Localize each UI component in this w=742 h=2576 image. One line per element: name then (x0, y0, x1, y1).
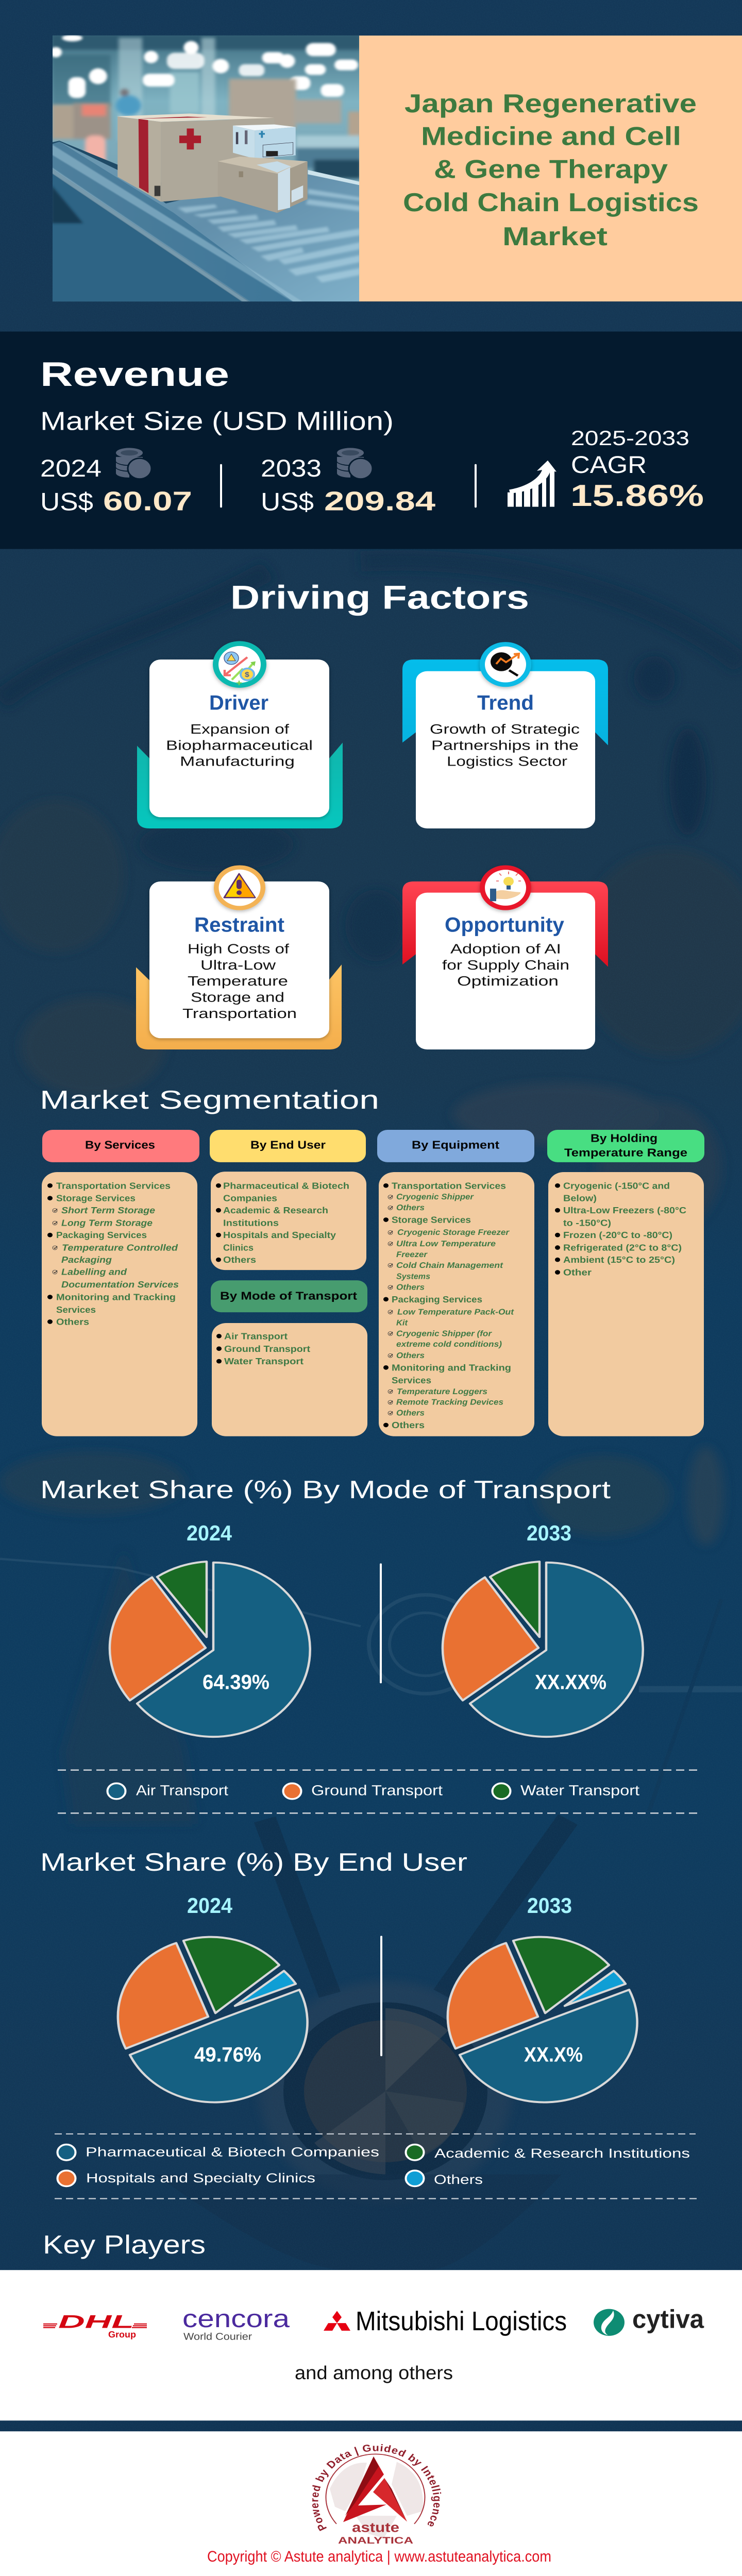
icon: warning triangle (214, 865, 265, 910)
list: temperature ranges: Frozen (-20°C to -80°C) (563, 1230, 672, 1241)
list: modes of transport: Air Transport (224, 1332, 288, 1342)
card: restraint (136, 865, 342, 1049)
description: restraint: High Costs of (188, 942, 290, 956)
revenue panel (0, 332, 742, 549)
legend: mode of transport: Water Transport (520, 1782, 639, 1799)
logo: cencora world courier: World Courier (183, 2331, 252, 2342)
footer panel (0, 2431, 742, 2576)
column: by holding temperature range (547, 1130, 704, 1436)
list: equipment: Cryogenic Shipper (for (396, 1329, 492, 1338)
list: equipment: Others (396, 1351, 425, 1360)
list: temperature ranges (548, 1172, 704, 1436)
list: temperature ranges: Ultra-Low Freezers (-80°C (563, 1206, 686, 1216)
list: services: Packaging Services (56, 1230, 147, 1241)
copyright line: Copyright © Astute analytica | www.astuteanalytica.com (207, 2548, 551, 2565)
list: equipment: Others (396, 1283, 425, 1292)
list: equipment: Cryogenic Storage Freezer (397, 1228, 510, 1237)
list: equipment: Others (396, 1409, 425, 1417)
list: services: Documentation Services (61, 1280, 179, 1290)
year label 2024: 2024 (187, 1521, 232, 1546)
description: trend: Partnerships in the (431, 738, 579, 753)
description: restraint (182, 942, 297, 1021)
list: equipment: extreme cold conditions) (396, 1340, 502, 1349)
stat: 2024: 2024 (40, 455, 102, 482)
header: by mode of transport (211, 1280, 367, 1312)
stat: 2033 (261, 448, 436, 516)
stat: 2033: 209.84 (324, 486, 436, 516)
header: by end user (210, 1130, 366, 1162)
list: services: Short Term Storage (61, 1206, 155, 1216)
legend: mode of transport (107, 1782, 639, 1799)
header: by holding temperature range: By Holding (591, 1132, 657, 1145)
card: trend (402, 642, 608, 828)
icon: coins (116, 448, 151, 479)
description: opportunity: Adoption of AI (450, 942, 561, 956)
list: end users: Academic & Research (223, 1206, 328, 1216)
year label 2024: 2024 (187, 1894, 232, 1918)
logo: astute analytica: Powered by Data | Guided by Intelligence (312, 2444, 441, 2531)
description: driver: Manufacturing (180, 754, 295, 769)
heading: restraint: Restraint (194, 913, 284, 936)
logo: DHL Group: DHL (58, 2311, 134, 2332)
list: services: Services (56, 1305, 96, 1315)
list: temperature ranges: Refrigerated (2°C to 8°C) (563, 1243, 682, 1253)
heading: market share by end user: Market Share (%) By End User (40, 1848, 467, 1876)
list: equipment: Packaging Services (392, 1295, 482, 1304)
stat: 2033: 2033 (261, 455, 322, 482)
CAGR stat (570, 427, 704, 513)
list: services: Others (56, 1317, 89, 1327)
heading: driver: Driver (209, 691, 268, 714)
hero banner (50, 34, 742, 303)
logo: cytiva: cytiva (632, 2304, 704, 2334)
legend: mode of transport: Ground Transport (311, 1782, 443, 1799)
heading: driving factors: Driving Factors (230, 579, 529, 616)
list: equipment: Services (392, 1376, 431, 1385)
list: equipment: Monitoring and Tracking (392, 1363, 511, 1373)
description: opportunity (442, 942, 569, 989)
description: trend: Growth of Strategic (430, 722, 580, 737)
list: services: Transportation Services (56, 1181, 171, 1191)
list: temperature ranges: Below) (563, 1194, 597, 1204)
icon: driver gears and arrows: $ (245, 671, 249, 679)
stat: 2033: US$ (261, 487, 314, 516)
header: by end user: By End User (250, 1139, 326, 1151)
chart: end user share 2024 (118, 1894, 308, 2103)
header: by services: By Services (85, 1139, 155, 1151)
value XX.X%: XX.X% (524, 2043, 583, 2066)
logo: astute analytica: ANALYTICA (338, 2536, 413, 2546)
header: by equipment (377, 1130, 534, 1162)
CAGR stat: CAGR (571, 451, 647, 479)
logo: DHL Group (43, 2311, 147, 2340)
list: equipment: Others (396, 1203, 425, 1212)
list: equipment (379, 1172, 534, 1436)
big cardboard box (116, 113, 274, 202)
panel: key players logos (0, 2270, 742, 2420)
list: modes of transport: Ground Transport (224, 1344, 310, 1354)
description: driver: Biopharmaceutical (166, 738, 313, 753)
year label 2033: 2033 (527, 1521, 571, 1546)
list: equipment: Storage Services (392, 1215, 471, 1225)
list: modes of transport (212, 1323, 367, 1436)
card: driver (137, 641, 343, 828)
chart: end user share 2033 (448, 1894, 637, 2103)
list: temperature ranges: Other (563, 1268, 592, 1278)
title text: Medicine and Cell (421, 122, 681, 151)
chart: transport share 2024 (110, 1521, 310, 1737)
legend: end user: Academic & Research Institutions (434, 2146, 690, 2161)
stat: 2024: 60.07 (103, 486, 192, 516)
heading: opportunity: Opportunity (445, 913, 564, 936)
list: end users: Pharmaceutical & Biotech (223, 1181, 349, 1191)
heading: market segmentation: Market Segmentation (40, 1086, 379, 1114)
logo: mitsubishi logistics: Mitsubishi Logistics (356, 2306, 567, 2336)
list: services: Packaging (61, 1255, 112, 1265)
title text (403, 89, 699, 251)
icon: idea bulb over hand (480, 865, 531, 910)
market size label: Market Size (USD Million) (40, 406, 394, 436)
list: end users: Companies (223, 1194, 277, 1204)
header: by holding temperature range (547, 1130, 704, 1162)
list: end users: Hospitals and Specialty (223, 1230, 336, 1241)
list: services (42, 1172, 197, 1436)
pie 2033 (443, 1562, 643, 1737)
list: temperature ranges: Ambient (15°C to 25°C) (563, 1255, 675, 1265)
list: end users: Institutions (223, 1218, 279, 1228)
list: equipment: Systems (396, 1272, 430, 1281)
logo: cencora world courier: cencora (182, 2304, 290, 2332)
icon: coins (337, 448, 373, 479)
heading: trend: Trend (477, 691, 534, 714)
legend: end user (58, 2144, 690, 2187)
year label 2033: 2033 (527, 1894, 572, 1918)
description: driver: Expansion of (190, 722, 290, 737)
title panel (359, 36, 742, 301)
description: trend (430, 722, 580, 769)
list: end users (211, 1172, 366, 1270)
description: trend: Logistics Sector (447, 754, 567, 769)
revenue heading: Revenue (40, 355, 229, 394)
description: opportunity: for Supply Chain (442, 958, 569, 973)
column: by end user and mode of transport (210, 1130, 367, 1436)
list: end users: Others (223, 1255, 256, 1265)
icon: growth chart arrow (508, 461, 556, 507)
list: equipment: Transportation Services (392, 1181, 506, 1191)
value 49.76%: 49.76% (194, 2043, 261, 2066)
list: end users: Clinics (223, 1243, 254, 1253)
stat: 2024: US$ (40, 487, 93, 516)
header: by equipment: By Equipment (412, 1139, 500, 1151)
logo: astute analytica: astute (352, 2520, 399, 2535)
list: equipment: Kit (396, 1318, 408, 1327)
list: temperature ranges: Cryogenic (-150°C and (563, 1181, 670, 1191)
hero photo: boxes on conveyor (50, 34, 362, 303)
card: opportunity (402, 865, 608, 1049)
stethoscope backdrop (155, 1820, 568, 2270)
header: by mode of transport: By Mode of Transport (220, 1290, 358, 1302)
value XX.XX%: XX.XX% (535, 1670, 606, 1693)
text: and among others: and among others (295, 2362, 453, 2383)
list: modes of transport: Water Transport (224, 1357, 303, 1367)
header: by holding temperature range: Temperature Range (564, 1146, 687, 1159)
CAGR stat: 2025-2033 (571, 427, 689, 450)
description: restraint: Storage and (191, 990, 284, 1005)
legend: end user: Others (434, 2173, 483, 2187)
logo: cytiva (594, 2304, 704, 2336)
heading: key players: Key Players (43, 2230, 206, 2259)
list: equipment: Freezer (396, 1250, 428, 1259)
list: equipment: Cold Chain Management (396, 1261, 503, 1269)
icon: driver gears and arrows (213, 641, 266, 688)
list: equipment: Ultra Low Temperature (396, 1239, 496, 1248)
list: services: Labelling and (61, 1267, 127, 1277)
header: by services (42, 1130, 199, 1162)
description: opportunity: Optimization (457, 974, 559, 989)
title text: Market (502, 222, 608, 251)
icon: trend magnifier (480, 642, 531, 687)
list: equipment: Low Temperature Pack-Out (397, 1307, 514, 1316)
legend: mode of transport: Air Transport (136, 1782, 228, 1799)
CAGR stat: 15.86% (570, 479, 704, 513)
list: equipment: Remote Tracking Devices (396, 1398, 503, 1406)
description: restraint: Transportation (182, 1006, 297, 1021)
list: equipment: Cryogenic Shipper (396, 1192, 474, 1201)
list: temperature ranges: to -150°C) (563, 1218, 611, 1228)
description: restraint: Temperature (188, 974, 288, 989)
pie 2024 (118, 1937, 308, 2103)
pie 2024 (110, 1562, 310, 1737)
medium cardboard box (218, 157, 308, 213)
small white box (233, 124, 296, 159)
value 64.39%: 64.39% (203, 1670, 269, 1693)
title text: Japan Regenerative (404, 89, 697, 118)
column: by services (42, 1130, 199, 1436)
legend: end user: Hospitals and Specialty Clinics (86, 2171, 315, 2185)
title text: & Gene Therapy (434, 155, 668, 184)
chart: transport share 2033 (443, 1521, 643, 1737)
stat: 2024 (40, 448, 192, 516)
heading: market share by mode of transport: Market Share (%) By Mode of Transport (40, 1476, 611, 1504)
legend: end user: Pharmaceutical & Biotech Companies (86, 2145, 379, 2160)
title text: Cold Chain Logistics (403, 188, 699, 217)
list: equipment: Temperature Loggers (397, 1387, 487, 1396)
list: services: Long Term Storage (61, 1218, 153, 1228)
list: services: Storage Services (56, 1194, 136, 1204)
column: by equipment (377, 1130, 534, 1436)
list: equipment: Others (392, 1420, 425, 1430)
list: services: Temperature Controlled (62, 1243, 178, 1253)
logo: DHL Group: Group (108, 2330, 136, 2340)
description: restraint: Ultra-Low (200, 958, 276, 973)
pie 2033 (448, 1937, 637, 2103)
list: services: Monitoring and Tracking (56, 1293, 176, 1302)
description: driver (166, 722, 313, 769)
